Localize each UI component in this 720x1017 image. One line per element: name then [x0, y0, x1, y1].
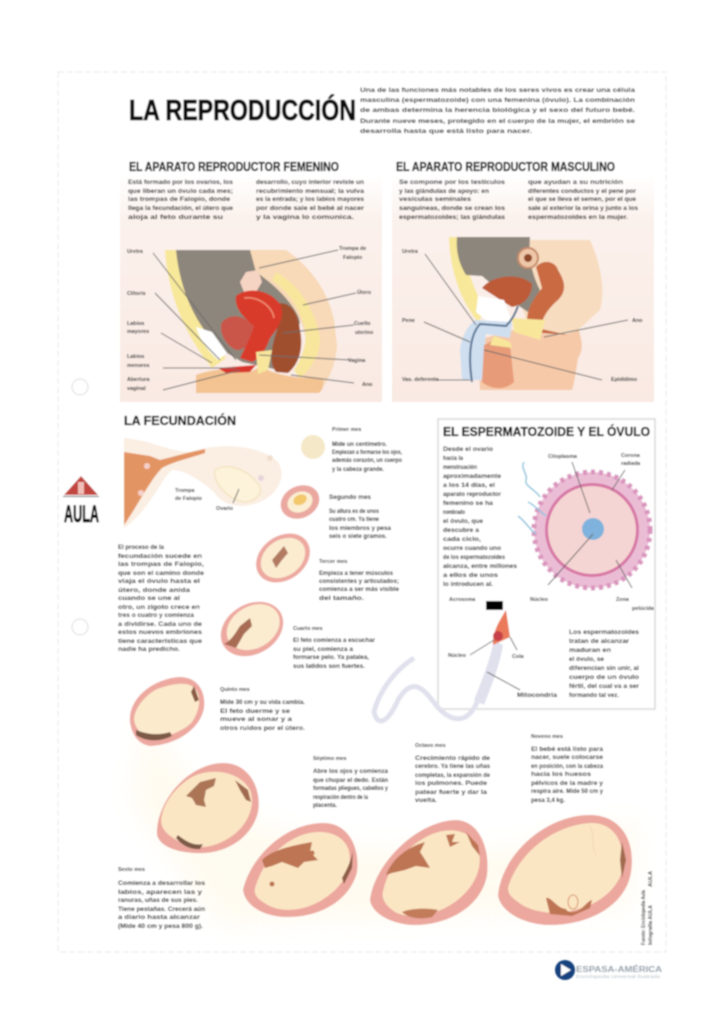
embryo: seventh month: [243, 756, 388, 917]
sperm and egg text: ocurre cuando uno: [443, 545, 501, 552]
illustration: sperm: Cola: [512, 654, 525, 660]
embryo: sixth month: a diario hasta alcanzar: [118, 914, 201, 921]
embryo: ninth month: pélvicos de la madre y: [531, 780, 603, 787]
embryo: third month: [247, 523, 399, 602]
female text: que liberan un óvulo cada mes;: [128, 188, 233, 195]
labels: male: Vas. deferente: [402, 377, 439, 383]
vertical credits: Fuente: Enciclopedia Aula: [641, 889, 647, 945]
embryo: fifth month: Quinto mes: [220, 687, 250, 693]
labels: female: Uretra: [127, 249, 144, 255]
labels: male: Pene: [402, 318, 415, 324]
female text: llega la fecundación, el útero que: [128, 205, 233, 212]
fertilization intro text: a dividirse. Cada uno de: [118, 621, 203, 628]
embryo: second month: Su altura es de unos: [329, 508, 379, 515]
embryo: first month: [301, 427, 402, 473]
intro text: Una de las funciones más notables de los seres vivos es crear una célula: [360, 87, 636, 94]
illustration: egg: Núcleo: [530, 597, 549, 603]
embryo: eighth month: los pulmones. Puede: [415, 780, 487, 787]
embryo: fifth month: El feto duerme y se: [220, 708, 291, 715]
embryo: third month: Tercer mes: [319, 559, 347, 565]
embryo: sixth month: [118, 763, 259, 930]
male text: sanguíneas, donde se crean los: [399, 205, 505, 212]
sperm and egg text: hacia la: [443, 455, 463, 462]
labels: female: uterino: [355, 330, 374, 336]
female text: por donde sale el bebé al nacer: [256, 205, 365, 212]
intro text: de ambas determina la herencia biológica y el sexo del futuro bebé.: [360, 107, 635, 114]
fertilization intro text: fecundación sucede en: [118, 553, 202, 560]
embryo: eighth month: Octavo mes: [415, 743, 446, 749]
embryo: first month: Primer mes: [332, 427, 361, 433]
embryo: ninth month: respira aire. Mide 50 cm y: [531, 788, 603, 795]
embryo: sixth month: Tiene pestañas. Crecerá aún: [118, 906, 205, 913]
vertical credits: Infografía AULA: [648, 905, 654, 945]
illustration: sperm: Acrosoma: [449, 597, 476, 603]
labels: female: Falopio: [343, 255, 363, 261]
fertilization intro text: El proceso de la: [118, 544, 164, 551]
embryo: eighth month: [370, 743, 490, 925]
sperm and egg text: de los espermatozoides: [443, 554, 505, 561]
vertical credits: [641, 871, 654, 945]
embryo: seventh month: Abre los ojos y comienza: [313, 768, 388, 775]
embryo: eighth month: vuelta.: [415, 797, 437, 804]
fertilization intro text: viaja el óvulo hasta el: [118, 578, 200, 585]
fertilization intro text: cuando se une al: [118, 595, 180, 602]
male text: espermatozoides en la mujer.: [528, 214, 628, 221]
embryo: eighth month: patear fuerte y dar la: [415, 789, 487, 796]
fertilization intro text: útero, donde anida: [118, 587, 191, 594]
page border: [58, 72, 666, 952]
male text: Se compone por los testículos: [399, 179, 506, 186]
male text: el que se lleva el semen, por el que: [528, 196, 636, 203]
labels: male: [402, 249, 643, 383]
title: LA REPRODUCCIÓN: [129, 93, 356, 127]
sperm and egg text: alcanza, entre millones: [443, 563, 517, 570]
male text: [399, 179, 638, 221]
female text: desarrollo, cuyo interior reviste un: [256, 179, 364, 186]
labels: female: Labios: [127, 354, 144, 360]
sperm and egg text: aproximadamente: [443, 473, 501, 480]
fertilization intro text: otro, un zigoto crece en: [118, 604, 200, 611]
embryo: ninth month: nacer, suele colocarse: [531, 754, 603, 761]
embryo: sixth month: Sexto mes: [118, 867, 145, 873]
labels: female: Clítoris: [127, 291, 146, 297]
sperm text: [569, 629, 640, 699]
illustration: sperm: Mitocondria: [517, 692, 557, 699]
labels: female: [127, 246, 374, 392]
illustration: egg: Zona: [616, 597, 630, 603]
illustration: male anatomy: [449, 237, 602, 390]
illustration: fallopian tube and ovary: de Falopio: [175, 496, 203, 502]
sperm text: el óvulo, se: [569, 656, 604, 663]
labels: female: Ano: [362, 382, 373, 388]
fertilization intro text: que son el camino donde: [118, 570, 204, 577]
fertilization intro text: tiene características que: [118, 638, 202, 645]
embryo: sixth month: labios, aparecen las y: [118, 889, 203, 896]
labels: female: Labios: [127, 321, 144, 327]
illustration: sperm: Núcleo: [448, 653, 467, 659]
male text: sale al exterior la orina y junto a los: [528, 205, 638, 212]
fertilization intro text: estos nuevos embriones: [118, 629, 202, 636]
sperm and egg text: lo introducen al.: [443, 581, 493, 588]
panel: female reproductive system: [120, 159, 382, 402]
illustration: egg: Citoplasma: [548, 454, 578, 460]
female text: [128, 179, 365, 221]
illustration: egg: Corona: [621, 453, 641, 459]
heading: sperm and egg: EL ESPERMATOZOIDE Y EL ÓVULO: [443, 424, 650, 439]
embryo: second month: seis o siete gramos.: [329, 533, 387, 540]
embryo: ninth month: El bebé está listo para: [531, 746, 603, 753]
fertilization intro text: nadie ha predicho.: [118, 646, 180, 653]
embryo: sixth month: Comienza a desarrollar los: [118, 880, 205, 887]
intro text: [360, 87, 636, 135]
pale arc background behind embryos: [130, 700, 640, 925]
labels: female: mayores: [127, 329, 149, 335]
intro text: desarrolla hasta que está listo para nacer.: [360, 128, 532, 135]
embryo: ninth month: en posición, con la cabeza: [531, 763, 603, 770]
publisher logo: [555, 960, 662, 980]
embryo: first month: Empiezan a formarse los ojos,: [332, 449, 402, 456]
embryo: ninth month: hacia los huesos: [531, 771, 592, 778]
sperm and egg text: menstruación: [443, 464, 477, 471]
illustration: female anatomy: [165, 250, 337, 393]
publisher logo: Enciclopedia Universal Ilustrada: [576, 974, 661, 979]
embryo: first month: Mide un centímetro.: [332, 441, 387, 448]
sperm and egg text: descubre a: [443, 527, 479, 534]
embryo: seventh month: formadas pliegues, cabellos y: [313, 785, 388, 792]
embryo: eighth month: cerebro. Ya tiene las uñas: [415, 763, 490, 770]
embryo: third month: Empieza a tener músculos: [319, 570, 393, 577]
labels: female: Abertura: [127, 377, 150, 383]
sperm and egg text: nombrado: [443, 509, 465, 516]
heading: male: EL APARATO REPRODUCTOR MASCULINO: [396, 159, 615, 174]
embryo: seventh month: placenta.: [313, 802, 337, 809]
heading: fertilization: LA FECUNDACIÓN: [124, 413, 236, 428]
vertical credits: AULA: [648, 871, 654, 887]
embryo: sixth month: ranuras, uñas de sus pies.: [118, 897, 198, 904]
sperm and egg text: Desde el ovario: [443, 446, 493, 453]
labels: female: vaginal: [127, 386, 146, 392]
embryo: ninth month: Noveno mes: [531, 734, 563, 740]
female text: recubrimiento mensual; la vulva: [256, 188, 364, 195]
embryo: third month: consistentes y articulados;: [319, 578, 399, 585]
sperm text: Los espermatozoides: [569, 629, 639, 636]
female text: es la entrada; y los labios mayores: [256, 196, 364, 203]
labels: female: Trompa de: [339, 246, 366, 252]
embryo: fourth month: formarse pelo. Ya patalea,: [293, 654, 369, 661]
embryo: fifth month: mueve al sonar y a: [220, 716, 293, 723]
embryo: fourth month: [211, 591, 375, 670]
embryo: fourth month: El feto comienza a escuchar: [293, 637, 375, 644]
embryo: fourth month: Cuarto mes: [293, 626, 323, 632]
sperm text: formando tal vez.: [569, 692, 619, 699]
embryo: eighth month: completas, la expansión de: [415, 772, 490, 779]
embryo: seventh month: respiración dentro de la: [313, 794, 368, 801]
panel: sperm and egg: [374, 419, 655, 721]
male text: y las glándulas de apoyo: en: [399, 188, 489, 195]
AULA logo: AULA: [64, 501, 99, 528]
labels: female: Cuello: [354, 321, 371, 327]
sperm and egg text: aparato reproductor: [443, 491, 501, 498]
labels: male: Ano: [632, 318, 643, 324]
female text: las trompas de Falopio, donde: [128, 196, 230, 203]
illustration: egg: [518, 453, 655, 612]
illustration: fallopian tube and ovary: Trompa: [175, 488, 195, 494]
embryo: fourth month: su piel, comienza a: [293, 646, 353, 653]
illustration: egg: pelúcida: [632, 606, 655, 612]
sperm text: diferencian sin unir, al: [569, 665, 639, 672]
binder holes: [72, 379, 88, 635]
female text: aloja al feto durante su: [128, 214, 223, 221]
labels: female: Vagina: [348, 358, 366, 364]
embryo: ninth month: pesa 3,4 kg.: [531, 797, 565, 804]
embryo: seventh month: que chupar el dedo. Están: [313, 777, 388, 784]
labels: female: menores: [127, 363, 149, 369]
female text: Está formado por los ovarios, los: [128, 179, 233, 186]
AULA logo: [63, 476, 99, 528]
panel: male reproductive system: [392, 159, 654, 402]
male text: vesículas seminales: [399, 196, 472, 203]
labels: female: Útero: [357, 289, 372, 296]
embryo: ninth month: [498, 734, 632, 925]
sperm and egg text: a los 14 días, el: [443, 482, 495, 489]
fertilization intro text: las trompas de Falopio,: [118, 561, 204, 568]
intro text: Durante nueve meses, protegido en el cuerpo de la mujer, el embrión se: [360, 118, 636, 125]
labels: male: Epidídimo: [611, 377, 638, 383]
illustration: fallopian tube and ovary: [124, 438, 282, 528]
embryo: fourth month: sus latidos son fuertes.: [293, 663, 365, 670]
embryo: eighth month: Crecimiento rápido de: [415, 755, 490, 762]
sperm and egg text: el óvulo, que: [443, 518, 483, 525]
embryo: seventh month: Séptimo mes: [313, 756, 347, 762]
embryo: second month: los miembros y pesa: [329, 525, 391, 532]
heading: female: EL APARATO REPRODUCTOR FEMENINO: [129, 159, 339, 174]
sperm text: cuerpo de un óvulo: [569, 674, 639, 681]
sperm and egg text: femenino se ha: [443, 500, 493, 507]
embryo: first month: además corazón, un cuerpo: [332, 457, 402, 464]
embryo: first month: y la cabeza grande.: [332, 466, 384, 473]
illustration: sperm: [374, 597, 557, 721]
sperm and egg text: [443, 446, 517, 588]
embryo: third month: comienza a ser más visible: [319, 586, 399, 593]
male text: espermatozoides; las glándulas: [399, 214, 505, 221]
sperm and egg text: a ellos de unos: [443, 572, 499, 579]
embryo: second month: [275, 479, 391, 540]
fertilization intro text: tres o cuatro y comienza: [118, 612, 194, 619]
publisher logo: ESPASA-AMÉRICA: [576, 965, 662, 974]
embryo: third month: del tamaño.: [319, 595, 364, 602]
sperm and egg text: cada ciclo,: [443, 536, 481, 543]
labels: male: Uretra: [402, 249, 419, 255]
male text: que ayudan a su nutrición: [528, 179, 623, 186]
female text: y la vagina lo comunica.: [256, 214, 354, 221]
illustration: egg: radiada: [621, 461, 641, 467]
sperm text: tratan de alcanzar: [569, 638, 630, 645]
embryo: second month: Segundo mes: [329, 494, 371, 501]
embryo: fifth month: Mide 30 cm y su vida cambia.: [220, 699, 305, 706]
male text: diferentes conductos y el pene por: [528, 188, 637, 195]
embryo: fifth month: otros ruidos por el útero.: [220, 725, 305, 732]
embryo: fifth month: [130, 677, 305, 746]
sperm text: maduran en: [569, 647, 611, 654]
embryo: second month: cuatro cm. Ya tiene: [329, 516, 379, 523]
embryo: sixth month: (Mide 40 cm y pesa 800 g).: [118, 923, 203, 930]
fertilization intro text: [118, 544, 204, 653]
intro text: masculina (espermatozoide) con una femenina (óvulo). La combinación: [360, 97, 635, 104]
sperm text: fértil, del cual va a ser: [569, 683, 640, 690]
illustration: fallopian tube and ovary: Ovario: [216, 506, 234, 512]
